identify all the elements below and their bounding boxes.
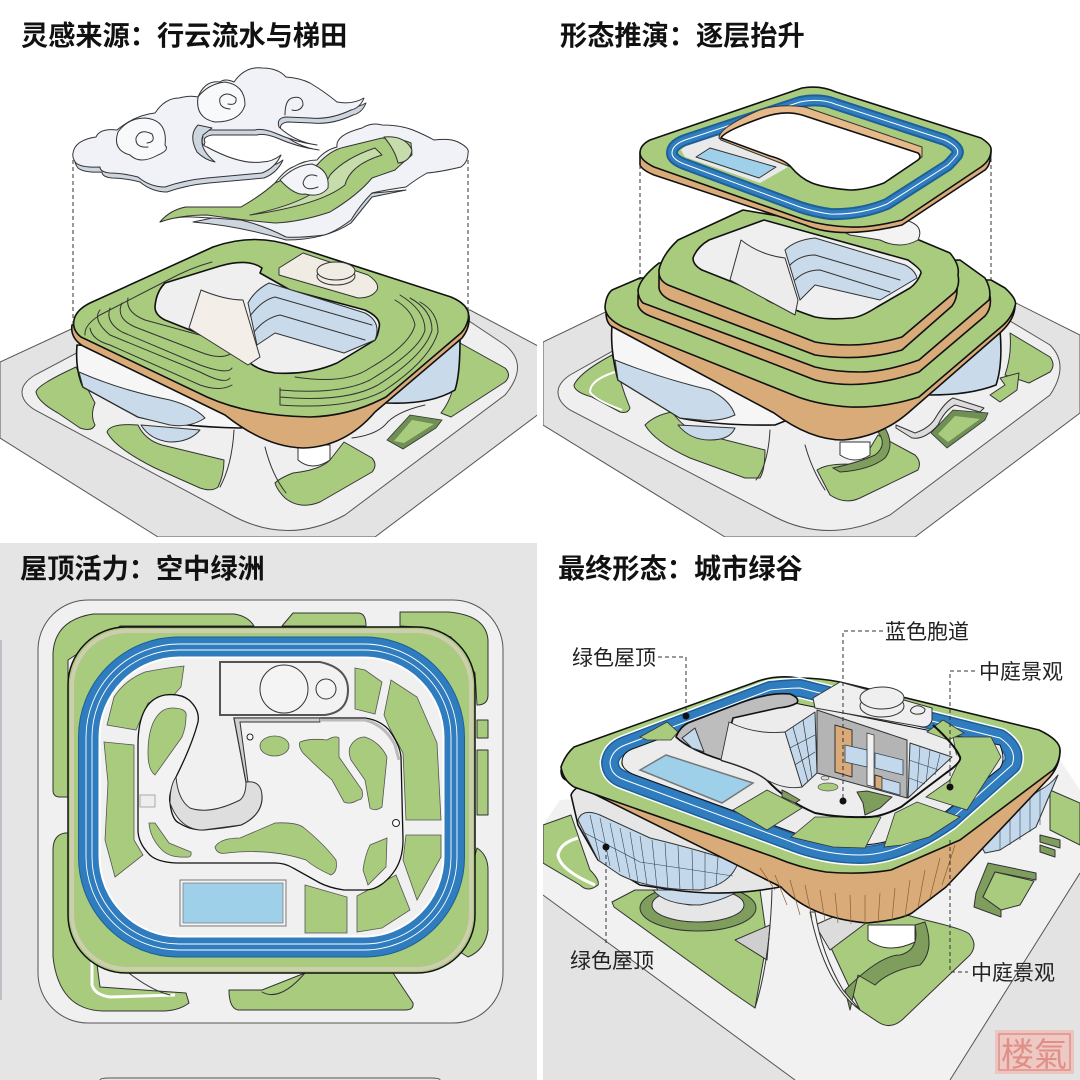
green plots on roof bbox=[104, 666, 441, 933]
roof pavilion bbox=[813, 682, 932, 727]
courtyard bbox=[155, 262, 379, 373]
building lower mass bbox=[612, 325, 1001, 460]
site ground bbox=[0, 310, 540, 537]
seal stamp: 楼氣 bbox=[1001, 1036, 1067, 1073]
roof with track bbox=[561, 677, 1060, 924]
lower glazed volumes bbox=[571, 775, 1058, 905]
site ground bbox=[543, 300, 1080, 537]
site plan bbox=[38, 600, 503, 1023]
panel: rooftop plan bbox=[0, 543, 537, 1080]
panel: final form bbox=[543, 553, 1080, 1080]
small courtyard details bbox=[140, 734, 400, 826]
label: courtyard top: 中庭景观 bbox=[979, 661, 1063, 684]
dashed guides bbox=[640, 158, 991, 280]
courtyard bbox=[676, 694, 960, 817]
pavilion plan bbox=[220, 662, 348, 715]
roof: terraced green bbox=[72, 240, 469, 448]
courtyard bbox=[138, 695, 403, 890]
swimming pool bbox=[180, 880, 286, 926]
terrace layer one bbox=[605, 278, 1016, 440]
green plots on roof bbox=[640, 720, 1001, 848]
floating roof plate bbox=[640, 87, 991, 232]
heading: rooftop: 屋顶活力：空中绿洲 bbox=[20, 553, 265, 584]
green plots in courtyard bbox=[148, 708, 387, 885]
terrace layer two bbox=[638, 260, 990, 384]
heading: final form: 最终形态：城市绿谷 bbox=[558, 553, 803, 584]
terrace layer three bbox=[659, 210, 959, 358]
courtyard bbox=[693, 220, 921, 319]
running track bbox=[78, 637, 464, 957]
rooftop pool bbox=[640, 755, 753, 803]
label: courtyard bottom: 中庭景观 bbox=[971, 962, 1055, 985]
cloud: green terraced bbox=[160, 124, 468, 240]
building lower mass bbox=[77, 340, 460, 466]
label: blue track: 蓝色胞道 bbox=[885, 621, 969, 644]
heading: inspiration: 灵感来源：行云流水与梯田 bbox=[21, 20, 347, 51]
label: green roof bottom: 绿色屋顶 bbox=[570, 950, 654, 973]
roof pavilion bbox=[279, 253, 378, 298]
site ground bbox=[543, 760, 1080, 1080]
building footprint bbox=[68, 627, 475, 973]
callout leaders bbox=[602, 631, 975, 972]
panel: inspiration bbox=[0, 20, 540, 537]
dashed guides bbox=[73, 160, 468, 328]
label: green roof top: 绿色屋顶 bbox=[572, 647, 656, 670]
heading: form evolution: 形态推演：逐层抬升 bbox=[560, 20, 805, 51]
panel: form evolution bbox=[543, 20, 1080, 537]
cloud: white scroll bbox=[73, 68, 366, 192]
